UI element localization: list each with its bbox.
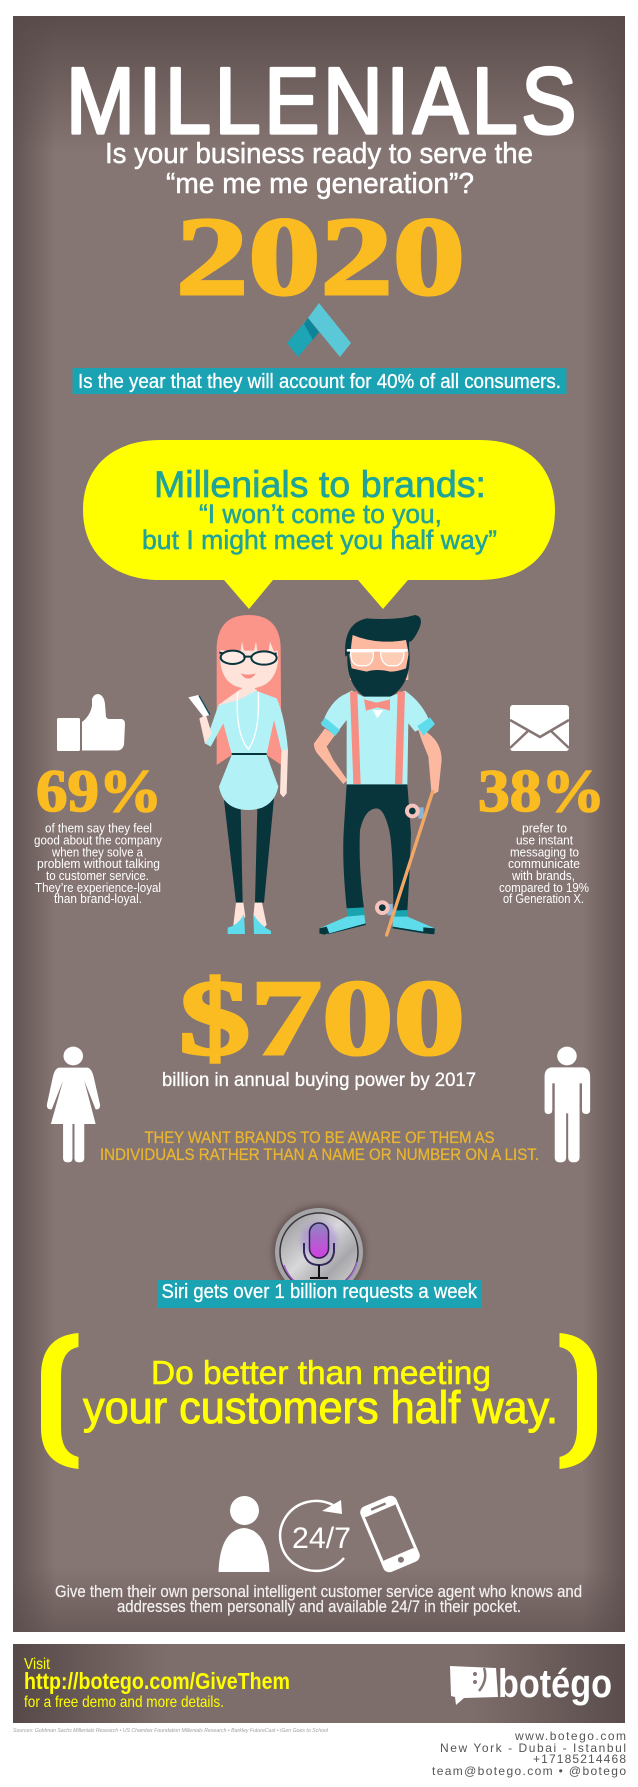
subtitle: Is your business ready to serve the <box>105 138 533 170</box>
icon: person <box>218 1496 270 1572</box>
logo: botego: botégo <box>498 1662 612 1706</box>
text: 69% description: They’re experience-loyal <box>35 881 161 895</box>
text: 38% description: prefer to <box>522 822 567 836</box>
contact details: New York - Dubai - Istanbul <box>440 1741 626 1755</box>
text: 69% description: than brand-loyal. <box>54 892 142 906</box>
title: MILLENIALS <box>66 48 576 153</box>
stat: 2020: 2020 <box>176 195 465 319</box>
icon: envelope <box>510 705 569 751</box>
sources: Sources: Goldman Sachs Millenials Research • US Chamber Foundation Millenials Research • Barkley FutureCast • iGen Goes to School <box>13 1728 329 1734</box>
icon: smartphone <box>360 1496 420 1572</box>
icon: 24/7 circular arrow: 24/7 <box>292 1522 351 1555</box>
contact details: team@botego.com • @botego <box>432 1764 626 1778</box>
speech bubble <box>83 440 555 609</box>
contact details: +17185214468 <box>533 1752 626 1766</box>
icon: woman figure <box>47 1047 100 1162</box>
call to action <box>83 1354 558 1433</box>
stat: 38%: 38% <box>478 758 605 824</box>
text: buying power: billion in annual buying power by 2017 <box>162 1069 476 1091</box>
contact details <box>432 1729 626 1778</box>
footer: visit link: http://botego.com/GiveThem <box>24 1668 290 1694</box>
text: 69% description <box>34 822 163 906</box>
text: 69% description: good about the company <box>34 834 163 848</box>
text: 69% description: to customer service. <box>46 869 149 883</box>
subtitle <box>105 138 533 200</box>
footer: visit link <box>24 1656 290 1711</box>
text: 38% description: use instant <box>516 834 573 848</box>
speech bubble: “I won’t come to you, <box>199 499 442 529</box>
text: 38% description <box>499 822 589 906</box>
right bracket <box>560 1333 597 1469</box>
banner: 40% of consumers: Is the year that they will account for 40% of all consumers. <box>78 371 561 393</box>
text: 38% description: messaging to <box>510 846 579 860</box>
icon: upward chevron <box>287 303 351 357</box>
footer: visit link: for a free demo and more details. <box>24 1694 224 1711</box>
icon: man figure <box>545 1047 590 1162</box>
stat: 69%: 69% <box>36 758 162 824</box>
text: awareness statement: INDIVIDUALS RATHER THAN A NAME OR NUMBER ON A LIST. <box>100 1145 539 1164</box>
illustration: woman with phone <box>188 615 288 934</box>
icon: siri microphone <box>272 1205 366 1299</box>
text: 69% description: when they solve a <box>51 846 143 860</box>
icon: 24/7 circular arrow <box>280 1500 351 1571</box>
text: 69% description: of them say they feel <box>45 822 152 836</box>
contact details: www.botego.com <box>514 1729 626 1743</box>
logo: botego <box>450 1662 612 1706</box>
text: 38% description: communicate <box>508 857 580 871</box>
text: awareness statement <box>100 1128 539 1164</box>
text: 38% description: with brands, <box>511 869 575 883</box>
stat: $700: $700 <box>179 959 465 1078</box>
text: 38% description: compared to 19% <box>499 881 589 895</box>
left bracket <box>41 1333 78 1469</box>
text: personal agent: Give them their own personal intelligent customer service agent who knows and <box>55 1582 582 1601</box>
speech bubble: but I might meet you half way” <box>142 525 497 555</box>
text: awareness statement: THEY WANT BRANDS TO BE AWARE OF THEM AS <box>144 1128 494 1147</box>
text: 69% description: problem without talking <box>37 857 160 871</box>
subtitle: “me me me generation”? <box>166 168 474 200</box>
call to action: your customers half way. <box>83 1382 558 1433</box>
text: personal agent: addresses them personally and available 24/7 in their pocket. <box>117 1597 521 1616</box>
footer: visit link: Visit <box>24 1656 50 1673</box>
call to action: Do better than meeting <box>151 1354 491 1391</box>
speech bubble: Millenials to brands: <box>154 464 486 505</box>
text: personal agent <box>55 1582 582 1616</box>
banner: siri requests: Siri gets over 1 billion requests a week <box>162 1281 478 1303</box>
panel: footer <box>13 1644 625 1723</box>
text: 38% description: of Generation X. <box>503 892 584 906</box>
icon: thumbs up <box>57 694 125 751</box>
illustration: man with skateboard <box>314 615 442 935</box>
